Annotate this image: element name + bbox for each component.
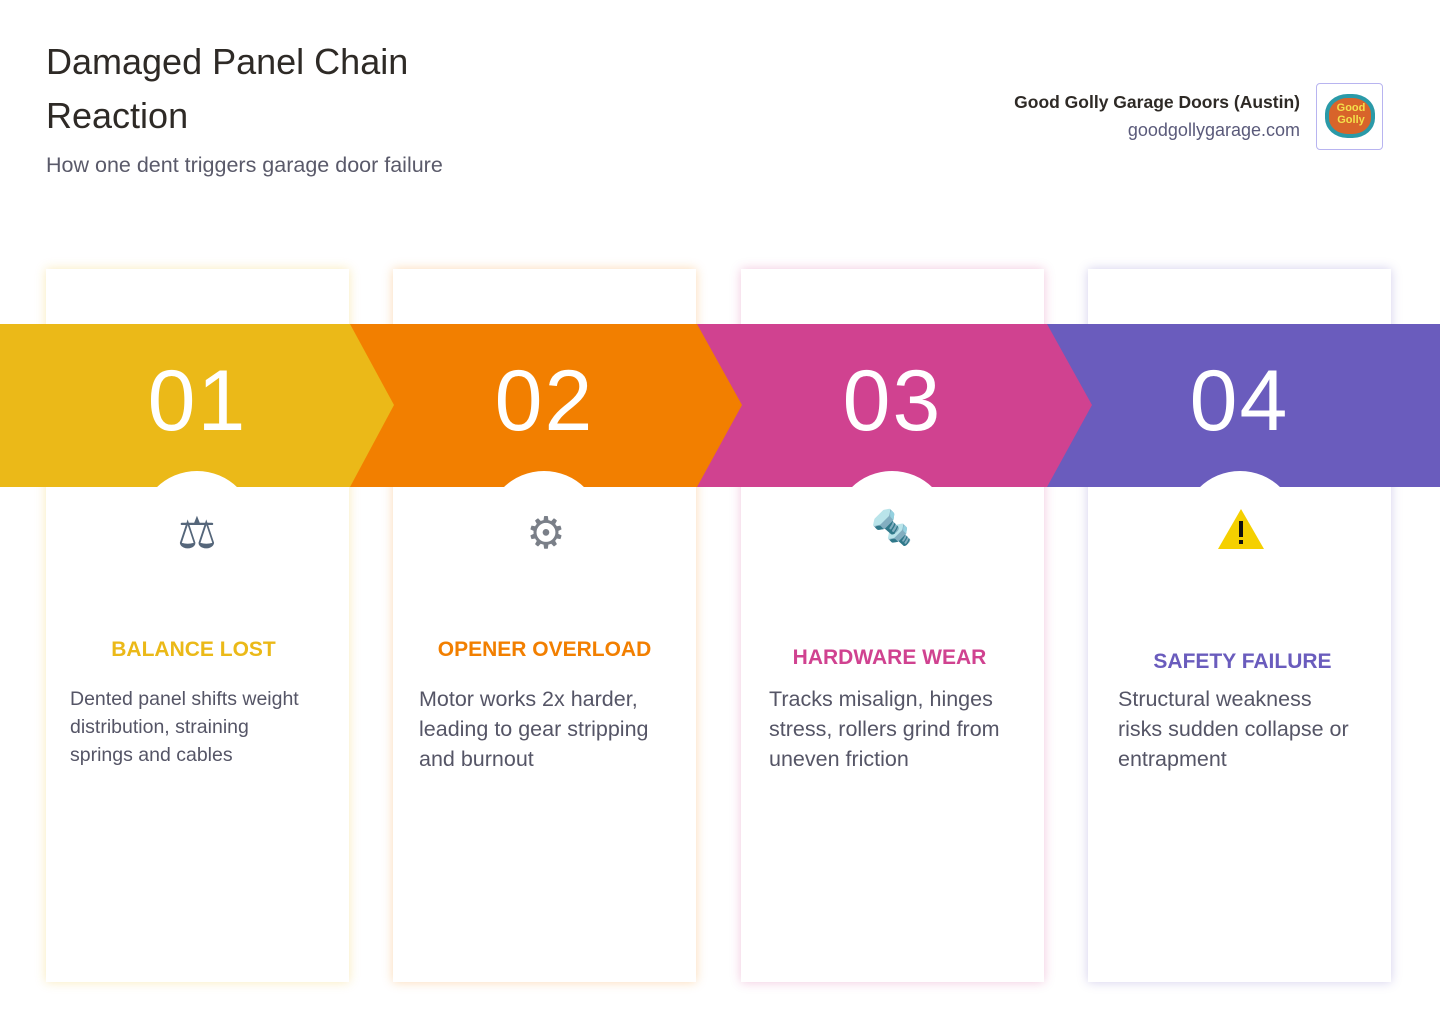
text 2: Motor works 2x harder, bbox=[419, 687, 638, 711]
text 4: entrapment bbox=[1118, 747, 1227, 771]
icon: scales: ⚖ bbox=[177, 509, 217, 558]
heading 4: SAFETY FAILURE bbox=[1153, 650, 1332, 673]
card 3 bbox=[741, 269, 1044, 982]
brand url: goodgollygarage.com bbox=[1128, 120, 1300, 140]
text 1: Dented panel shifts weight bbox=[70, 688, 299, 710]
icon: gear: ⚙ bbox=[526, 509, 566, 558]
heading 3: HARDWARE WEAR bbox=[793, 646, 986, 669]
logo: Good bbox=[1337, 102, 1365, 114]
text 4: risks sudden collapse or bbox=[1118, 717, 1349, 741]
text 3 bbox=[769, 687, 1000, 771]
brand bbox=[1014, 83, 1383, 150]
text 1 bbox=[70, 688, 299, 766]
brand name: Good Golly Garage Doors (Austin) bbox=[1014, 92, 1300, 112]
logo bbox=[1316, 83, 1383, 150]
number 03: 03 bbox=[843, 353, 942, 449]
text 2: and burnout bbox=[419, 747, 534, 771]
logo: Golly bbox=[1337, 114, 1365, 126]
card 2 bbox=[393, 269, 696, 982]
icon: nut and bolt: 🔩 bbox=[871, 509, 913, 547]
subtitle: How one dent triggers garage door failure bbox=[46, 153, 443, 177]
heading 2: OPENER OVERLOAD bbox=[438, 638, 651, 661]
text 2: leading to gear stripping bbox=[419, 717, 648, 741]
text 3: uneven friction bbox=[769, 747, 909, 771]
card 4 bbox=[1088, 269, 1391, 982]
title: Damaged Panel Chain bbox=[46, 41, 408, 82]
text 4: Structural weakness bbox=[1118, 687, 1312, 711]
icon: warning bbox=[1218, 509, 1264, 549]
text 3: Tracks misalign, hinges bbox=[769, 687, 993, 711]
text 3: stress, rollers grind from bbox=[769, 717, 1000, 741]
text 1: distribution, straining bbox=[70, 716, 249, 738]
number 02: 02 bbox=[495, 353, 594, 449]
chevron band bbox=[0, 324, 1440, 487]
number 01: 01 bbox=[148, 353, 247, 449]
text 1: springs and cables bbox=[70, 744, 233, 766]
number 04: 04 bbox=[1190, 353, 1289, 449]
card 1 bbox=[46, 269, 349, 982]
text 4 bbox=[1118, 687, 1349, 771]
title: Reaction bbox=[46, 95, 188, 136]
text 2 bbox=[419, 687, 648, 771]
heading 1: BALANCE LOST bbox=[111, 638, 276, 661]
title bbox=[46, 41, 408, 136]
